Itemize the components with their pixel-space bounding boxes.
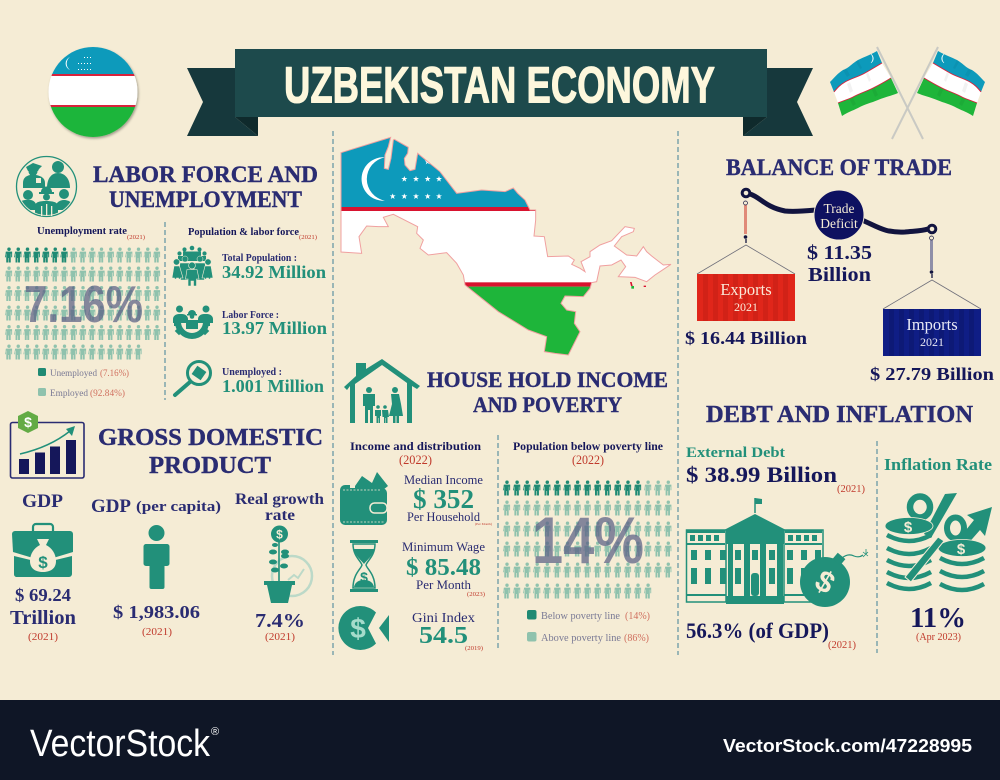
icon: government building with bomb <box>686 498 868 607</box>
real growth rate column <box>235 491 324 643</box>
map of Uzbekistan with flag fill <box>340 136 672 356</box>
pictogram: poverty <box>503 480 671 598</box>
sub-heading: population below poverty line: Population below poverty line <box>513 439 664 453</box>
external debt: External Debt <box>686 445 785 461</box>
GDP column: $ 69.24 <box>15 585 71 605</box>
icon: gini pie <box>338 606 389 650</box>
stat: labor force: Labor Force : <box>222 310 279 321</box>
stat: minimum wage: Minimum Wage <box>402 539 485 554</box>
scale beam <box>750 194 928 232</box>
stat: minimum wage: (2023) <box>467 591 485 598</box>
real growth rate column: (2021) <box>265 631 295 643</box>
icon: wallet <box>340 472 388 525</box>
icon: gini pie: $ <box>350 613 366 644</box>
sub-heading: unemployment rate: (2021) <box>127 234 145 241</box>
stat: unemployed: Unemployed : <box>222 367 282 378</box>
heading: DEBT AND INFLATION <box>706 402 974 428</box>
icon: crowd <box>172 246 213 286</box>
stat: gini index: 54.5 <box>419 623 468 649</box>
panel: labor force and unemployment <box>5 156 327 399</box>
icon: workers circle <box>16 156 76 217</box>
stat: gini index: Gini Index <box>412 611 475 626</box>
stat: unemployed <box>222 367 324 396</box>
sub-heading: population below poverty line <box>513 439 664 467</box>
external debt: $ 38.99 Billion <box>686 462 837 487</box>
icon: money plant <box>264 526 312 603</box>
stat: median income: (Per Month) <box>475 522 493 526</box>
imports container: 2021 <box>920 335 944 349</box>
sub-heading: unemployment rate <box>37 226 145 241</box>
heading: AND POVERTY <box>473 392 622 417</box>
icon: hourglass: $ <box>360 569 368 585</box>
heading <box>98 425 323 479</box>
stat: minimum wage <box>402 539 485 598</box>
legend: (92.84%) <box>90 388 125 399</box>
icon: briefcase <box>12 524 73 577</box>
stat: minimum wage: Per Month <box>416 577 471 592</box>
legend: Unemployed <box>50 369 97 379</box>
heading: GROSS DOMESTIC <box>98 425 323 451</box>
icon: coins and percent <box>885 493 992 590</box>
panel: balance of trade <box>685 155 994 384</box>
stat: minimum wage: $ 85.48 <box>406 555 481 581</box>
icon: person <box>144 525 170 589</box>
stat: total population: 34.92 Million <box>222 262 326 282</box>
stat: gini index <box>412 611 483 652</box>
icon: labor force gear <box>173 306 213 338</box>
percentage of GDP: (2021) <box>828 640 856 651</box>
big number: 14%: 14% <box>532 503 644 577</box>
stat: median income <box>404 472 493 526</box>
icon: coins and percent: $ <box>957 541 966 558</box>
legend: (14%) <box>625 611 650 622</box>
watermark footer bar: ® <box>211 726 219 738</box>
crossed flags <box>830 47 985 139</box>
percentage of GDP <box>686 618 856 651</box>
heading: PRODUCT <box>149 453 271 479</box>
heading: UNEMPLOYMENT <box>109 187 302 212</box>
beam ends and ropes <box>742 189 936 278</box>
heading: LABOR FORCE AND <box>93 162 318 187</box>
external debt <box>686 445 865 495</box>
stat: labor force <box>222 310 327 338</box>
sub-heading: population and labor force: Population & labor force <box>188 227 300 238</box>
trade deficit value: Billion <box>808 264 871 286</box>
GDP column: (2021) <box>28 631 58 643</box>
legend <box>38 368 129 399</box>
sub-heading: population and labor force: (2021) <box>299 234 317 241</box>
imports container <box>883 280 981 356</box>
trade deficit badge <box>814 190 864 240</box>
sub-heading: population below poverty line: (2022) <box>572 453 604 467</box>
legend: Below poverty line <box>541 611 620 622</box>
sub-heading: income and distribution <box>350 439 481 467</box>
legend: Employed <box>50 389 88 399</box>
sub-heading: population and labor force <box>188 227 317 241</box>
stat: gini index: (2019) <box>465 645 483 652</box>
heading: BALANCE OF TRADE <box>726 155 952 180</box>
trade deficit value <box>807 242 872 286</box>
icon: growth chart: $ <box>24 414 32 430</box>
GDP column <box>10 491 76 643</box>
GDP per capita column: GDP <box>91 496 131 517</box>
inflation value: (Apr 2023) <box>916 632 961 643</box>
inflation heading: Inflation Rate <box>884 455 992 474</box>
legend: (7.16%) <box>100 368 129 379</box>
heading <box>93 162 318 212</box>
GDP per capita column: $ 1,983.06 <box>113 602 200 622</box>
icon: house with family <box>344 359 420 423</box>
heading <box>427 367 668 417</box>
exports value: $ 16.44 Billion <box>685 328 807 348</box>
exports container: Exports <box>720 280 772 299</box>
circular flag of Uzbekistan <box>48 47 138 138</box>
GDP column: GDP <box>22 491 63 512</box>
title banner <box>187 49 813 136</box>
sub-heading: income and distribution: Income and distribution <box>350 439 481 453</box>
icon: money plant: $ <box>276 528 283 542</box>
icon: growth chart <box>10 411 84 478</box>
icon: hourglass <box>350 540 378 592</box>
stat: total population: Total Population : <box>222 253 297 264</box>
section divider lines <box>165 131 877 655</box>
icon: briefcase: $ <box>38 553 48 572</box>
panel: household income and poverty <box>338 359 671 652</box>
stat: unemployed: 1.001 Million <box>222 376 324 396</box>
stat: total population <box>222 253 326 282</box>
inflation value: 11% <box>910 603 966 634</box>
icon: coins and percent: $ <box>904 519 913 536</box>
trade deficit value: $ 11.35 <box>807 242 872 264</box>
imports container: Imports <box>906 315 958 334</box>
trade deficit badge: Deficit <box>820 216 858 231</box>
stat: median income: Per Household <box>407 509 480 524</box>
pictogram: unemployment <box>5 248 160 360</box>
GDP per capita column: (2021) <box>142 626 172 638</box>
panel: debt and inflation <box>686 402 992 651</box>
GDP per capita column: (per capita) <box>136 499 221 515</box>
heading: HOUSE HOLD INCOME <box>427 367 668 392</box>
watermark footer bar: VectorStock.com/47228995 <box>723 736 972 756</box>
stat: labor force: 13.97 Million <box>222 318 327 338</box>
trade deficit badge: Trade <box>823 201 855 216</box>
exports container: 2021 <box>734 300 758 314</box>
real growth rate column: rate <box>265 507 295 524</box>
watermark footer bar: VectorStock <box>30 723 211 765</box>
legend: (86%) <box>624 633 649 644</box>
icon: magnifier <box>175 362 210 395</box>
GDP per capita column <box>91 496 221 638</box>
panel: gross domestic product <box>10 411 324 643</box>
percentage of GDP: 56.3% (of GDP) <box>686 618 829 643</box>
title: UZBEKISTAN ECONOMY <box>284 56 715 114</box>
external debt: (2021) <box>837 484 865 495</box>
real growth rate column: 7.4% <box>255 610 305 632</box>
sub-heading: income and distribution: (2022) <box>399 453 432 467</box>
icon: government building with bomb: $ <box>809 564 840 601</box>
stat: median income: Median Income <box>404 472 483 487</box>
real growth rate column: Real growth <box>235 491 324 508</box>
big number: 7.16%: 7.16% <box>24 276 143 334</box>
legend <box>527 610 650 644</box>
GDP column: Trillion <box>10 607 76 629</box>
sub-heading: unemployment rate: Unemployment rate <box>37 226 128 237</box>
stat: median income: $ 352 <box>413 484 474 514</box>
legend: Above poverty line <box>541 633 621 644</box>
exports container <box>697 245 795 321</box>
watermark footer bar <box>0 700 1000 780</box>
imports value: $ 27.79 Billion <box>870 364 994 384</box>
